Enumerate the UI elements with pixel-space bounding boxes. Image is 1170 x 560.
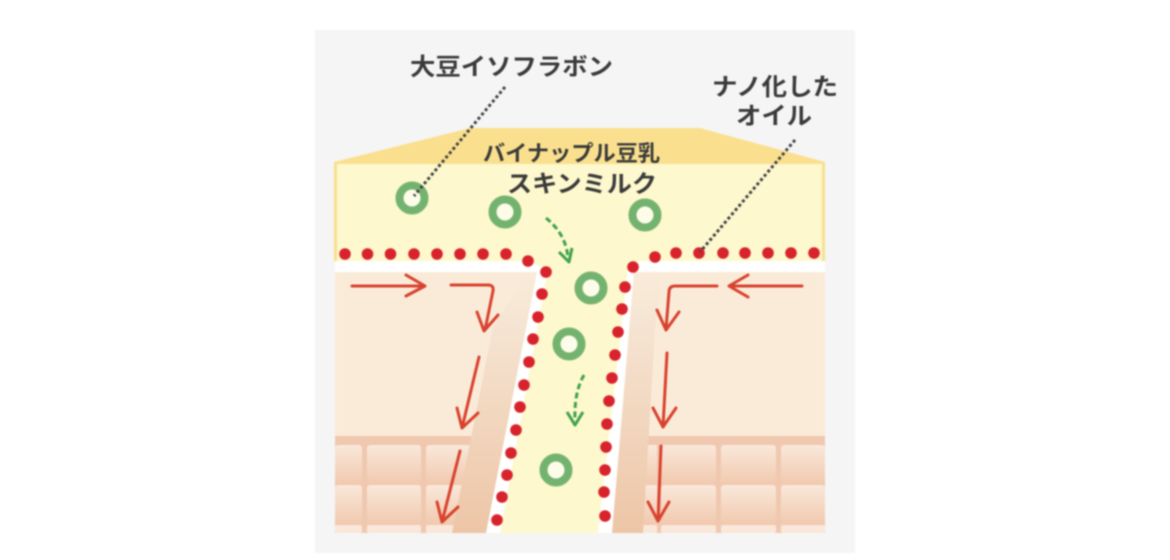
- label: soy isoflavone: 大豆イソフラボン: [410, 54, 613, 81]
- green isoflavone rings: [400, 186, 658, 482]
- panel: grey background: [315, 30, 855, 553]
- panel: right skin tissue: [611, 272, 825, 533]
- green dashed arrow: upper: [546, 218, 572, 262]
- red arrows: right side: [648, 275, 802, 521]
- label: nano oil line 2: オイル: [736, 103, 812, 130]
- red arrows: left side: [352, 275, 498, 522]
- panel: left skin tissue: [335, 272, 537, 533]
- label: nano oil line 1: ナノ化した: [712, 74, 838, 101]
- label: skin milk: スキンミルク: [507, 171, 657, 198]
- panel: pore canal: [486, 255, 650, 533]
- leader line: isoflavone: [414, 87, 505, 196]
- green dashed arrow: lower: [567, 375, 584, 425]
- leader line: nano oil: [700, 140, 795, 252]
- label: pineapple soy milk: バイナップル豆乳: [483, 141, 660, 166]
- panel: skin milk layer: [334, 128, 825, 262]
- red oil dots: [339, 247, 820, 526]
- panel: white surface band: [335, 261, 825, 273]
